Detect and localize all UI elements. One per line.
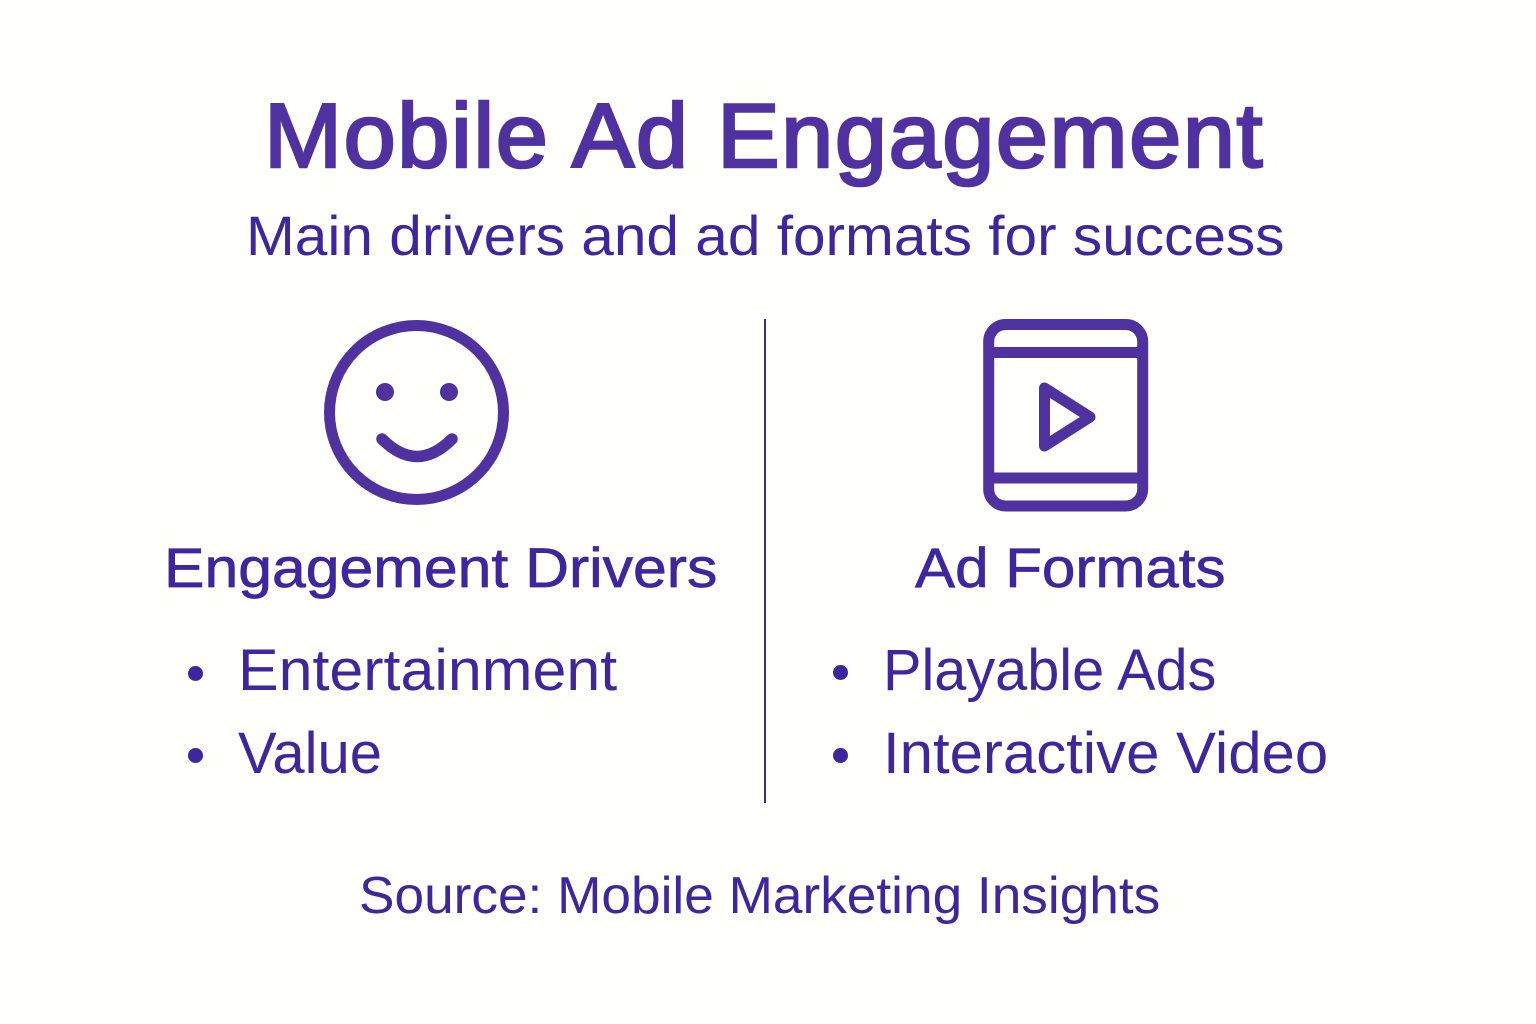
bullet: entertainment: Entertainment xyxy=(238,638,617,703)
bullet: interactive video: Interactive Video xyxy=(883,721,1328,786)
bullet dot xyxy=(833,748,848,763)
bullet dot xyxy=(188,748,203,763)
icon: smiley face xyxy=(324,320,509,505)
bullet dot xyxy=(833,665,848,680)
icon: mobile video player xyxy=(983,319,1148,512)
bullet: value: Value xyxy=(238,721,382,786)
list: ad formats xyxy=(833,638,1328,786)
source: Source: Mobile Marketing Insights xyxy=(359,867,1160,925)
title: Mobile Ad Engagement xyxy=(264,86,1264,187)
list: engagement drivers xyxy=(188,638,617,786)
heading: ad formats: Ad Formats xyxy=(915,536,1226,599)
subtitle: Main drivers and ad formats for success xyxy=(246,204,1284,267)
divider xyxy=(764,319,766,803)
bullet dot xyxy=(188,666,203,681)
bullet: playable ads: Playable Ads xyxy=(883,638,1216,703)
heading: engagement drivers: Engagement Drivers xyxy=(164,536,717,599)
